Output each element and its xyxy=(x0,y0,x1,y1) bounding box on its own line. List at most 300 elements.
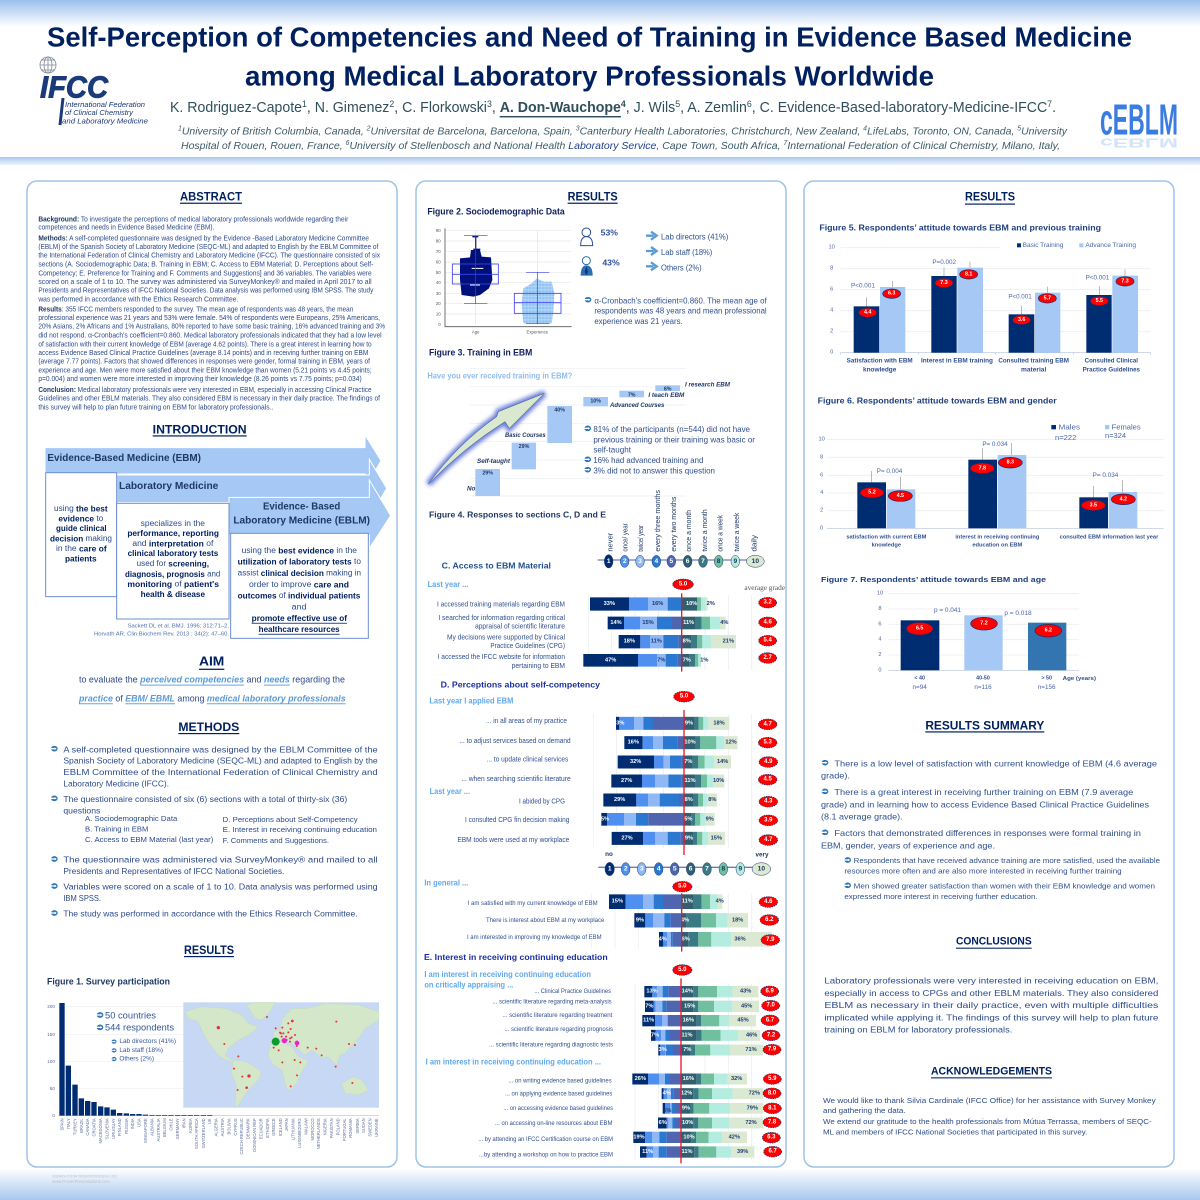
row: on-line resources xyxy=(495,1117,781,1128)
bar chart: gender: 8 xyxy=(820,454,823,460)
frequency scale 1-10: 9 xyxy=(733,558,737,565)
bar chart: participation by country: CHILE xyxy=(168,1118,173,1131)
panel: abstract: Presidents and Representatives of IFCC National Societies. Data analysis was performed using IBM SPSS. The study xyxy=(38,287,374,295)
frequency scale labels xyxy=(605,490,758,552)
row: training materials: I accessed training materials regarding EBM xyxy=(437,599,565,608)
bar chart: participation by country: FINLAND xyxy=(117,1118,122,1136)
reference badge 5.0 xyxy=(673,579,693,590)
bar chart: previous training: P<0.001 xyxy=(851,282,875,289)
conclusions text: especially in access to CPGs and other EBLM materials. They also considered xyxy=(824,988,1159,998)
row: clinical practice guidelines: My decisions were supported by Clinical xyxy=(447,632,565,641)
bar chart: participation by country: CANADA xyxy=(85,1118,90,1136)
box: EBM definition: decision making xyxy=(50,534,112,543)
authors: , xyxy=(492,100,500,116)
bar chart: gender: interest in receiving continuing xyxy=(955,534,1039,540)
poster credit: www.PosterPresentations.com xyxy=(52,1179,110,1184)
logo: IFCC: and Laboratory Medicine xyxy=(62,118,148,126)
bar chart: participation by country: 150 xyxy=(47,1032,55,1037)
bar chart: previous training: P=0.002 xyxy=(932,259,956,266)
conclusions text: training on EBLM for laboratory professionals. xyxy=(824,1025,1012,1035)
panel: right column xyxy=(804,181,1174,1167)
reference line at 5.0 xyxy=(680,893,684,952)
figure 2 title: Figure 2. Sociodemographic Data xyxy=(427,207,565,217)
panel: abstract: Competency; E. Preference for Training and F. Comments and Suggestions] and 36 variables. The variables were xyxy=(38,269,372,277)
methods: IBM SPSS. xyxy=(63,893,101,903)
reference badge 5.0 xyxy=(674,691,694,702)
aim xyxy=(78,655,346,703)
callout: countries and respondents: Lab directors (41%) xyxy=(119,1038,176,1045)
training bullet list xyxy=(584,424,755,475)
bar chart: age: 40-50 xyxy=(976,676,990,682)
frequency scale labels: twice a month xyxy=(700,509,709,552)
row: writing guidelines: 16% xyxy=(683,1076,694,1082)
row: on-line resources: ... on accessing on-line resources about EBM xyxy=(495,1120,612,1127)
frequency scale labels: daily xyxy=(749,535,758,552)
row: certification course: 19% xyxy=(633,1134,645,1140)
box plot: age and experience: 0 xyxy=(438,322,441,327)
bar chart: participation by country: SLOVENIA xyxy=(104,1118,109,1139)
panel: abstract: professional experience was 21 years and 53% were female. 54% of respondents were Europeans, 25% Americans, xyxy=(38,314,380,322)
bar chart: age: n=94 xyxy=(913,684,927,691)
arrow: evidence-based medicine xyxy=(45,435,381,488)
row: abided by CPG xyxy=(519,796,778,807)
authors: 4 xyxy=(621,99,626,109)
bar chart: previous training: Consulted Clinical xyxy=(1085,359,1138,365)
results heading and figures 2-3 xyxy=(427,190,767,496)
bar chart: gender: 6 xyxy=(820,472,823,478)
row: clinical practice guidelines: 13% xyxy=(646,989,658,995)
bar chart: participation by country: SWEDEN xyxy=(367,1118,372,1137)
methods: METHODS xyxy=(178,720,239,734)
figure 4 title: Figure 4. Responses to sections C, D and E xyxy=(429,509,606,519)
box plot: age and experience: 60 xyxy=(436,259,441,264)
summary bullet list: (8.1 average grade). xyxy=(821,812,903,822)
row: writing guidelines: 26% xyxy=(635,1076,646,1082)
bar chart: age: p = 0.041 xyxy=(934,607,961,614)
bar chart: previous training: 10 xyxy=(829,245,835,251)
results: figure 1: RESULTS xyxy=(184,943,234,957)
affiliations: 2 xyxy=(366,125,371,132)
row: writing guidelines xyxy=(508,1074,781,1084)
waterfall chart: training in EBM: 10% xyxy=(590,399,601,405)
row: abided by CPG: 4.3 xyxy=(764,799,773,805)
row: workshop: 39% xyxy=(737,1149,748,1155)
row: applying guidelines xyxy=(505,1088,781,1099)
box plot: age and experience: Experience xyxy=(527,329,549,334)
bar chart: age: 10 xyxy=(877,591,883,597)
frequency scale labels: every three months xyxy=(653,490,662,552)
box: EBM definition xyxy=(46,473,117,597)
row: meta-analysis: 7% xyxy=(645,1003,653,1009)
row: diagnostic tests xyxy=(489,1041,781,1055)
bar chart: gender: 4 xyxy=(820,490,823,496)
waterfall chart: training in EBM: 29% xyxy=(519,444,530,450)
row: clinical practice guidelines: 43% xyxy=(740,989,751,995)
row: prognosis: 46% xyxy=(746,1032,757,1038)
box: laboratory medicine definition: health & disease xyxy=(141,590,206,599)
methods: E. Interest in receiving continuing education xyxy=(223,825,377,834)
row: clinical practice guidelines: Practice Guidelines (CPG) xyxy=(490,641,565,650)
aim: practice of EBM/ EBML among medical laboratory professionals xyxy=(78,693,346,703)
row: adjust services xyxy=(459,736,777,748)
page background: top gradient band xyxy=(0,0,1200,27)
box: EBM definition: guide clinical xyxy=(56,524,107,533)
row: meta-analysis: ... scientific literature regarding meta-analysis xyxy=(492,998,612,1005)
bar chart: gender: knowledge xyxy=(872,542,901,548)
waterfall chart: training in EBM xyxy=(467,368,731,496)
row: EBM tools xyxy=(457,835,778,845)
acknowledgements text: We extend our gratitude to the health professionals from Mútua Terrassa, members of SEQC- xyxy=(823,1117,1152,1126)
row: update clinical services: 4.9 xyxy=(764,759,773,765)
panel: abstract: (EBLM) of the Spanish Society of Laboratory Medicine (SEQC-ML) and adapted to English by the EBLM Committee of xyxy=(38,243,378,251)
bar chart: participation by country: AUSTRIA xyxy=(220,1118,225,1136)
bar chart: participation by country: BOLIVIA xyxy=(226,1118,231,1135)
row: treatment: ... scientific literature regarding treatment xyxy=(502,1012,613,1019)
row: adjust services: 12% xyxy=(725,740,737,746)
authors: 6 xyxy=(747,99,752,109)
row: accessing guidelines xyxy=(503,1103,781,1114)
row: all areas xyxy=(486,716,777,730)
row: applying guidelines: ... on applying evidence based guidelines xyxy=(505,1090,612,1097)
affiliations: Laboratory Service, Cape Town, South Africa, xyxy=(568,140,781,152)
authors: , C. Evidence-Based-laboratory-Medicine-IFCC xyxy=(752,100,1047,116)
bar chart: gender: 4.2 xyxy=(1120,496,1127,502)
row: workshop: 11% xyxy=(642,1149,653,1155)
row: certification course: 6.3 xyxy=(767,1135,776,1141)
bar chart: participation by country: GREECE xyxy=(271,1118,276,1136)
row: IFCC website: 47% xyxy=(605,657,616,663)
panel: abstract: this survey will help to plan future training on EBM for laboratory professionals.. xyxy=(38,403,273,411)
row: IFCC website: 7% xyxy=(657,657,665,663)
authors: . xyxy=(1052,100,1056,116)
bar chart: participation by country: GERMANY xyxy=(175,1118,180,1139)
training bullet list: 3% did not to answer this question xyxy=(593,465,715,475)
row: clinical practice guidelines: 8% xyxy=(683,639,691,645)
row: meta-analysis: 7.0 xyxy=(766,1003,775,1009)
row: abided by CPG: 8% xyxy=(708,797,716,803)
panel: abstract: the International Federation of Clinical Chemistry and Laboratory Medicine (IFCC). The questionnaire consisted of six xyxy=(38,252,380,260)
bar chart: participation by country: ICELAND xyxy=(278,1118,283,1136)
frequency scale 1-10: 4 xyxy=(654,558,658,565)
bar chart: gender: 7.8 xyxy=(979,465,986,471)
row: critical appraisal: 14% xyxy=(610,620,622,626)
bar chart: gender: 3.5 xyxy=(1090,502,1097,508)
row: all areas: 3% xyxy=(616,720,624,726)
methods: The questionnaire was administered via SurveyMonkey® and mailed to all xyxy=(63,855,378,865)
row: treatment: 16% xyxy=(683,1018,694,1024)
bar chart: participation by country: URUGUAY xyxy=(111,1118,116,1139)
agreement scale 1-10: 1 xyxy=(608,865,612,872)
methods: The questionnaire consisted of six (6) sections with a total of thirty-six (36) xyxy=(63,794,348,804)
row: adjust services: 16% xyxy=(628,740,639,746)
methods: questions xyxy=(63,805,100,815)
row: adjust services: 5.3 xyxy=(763,740,772,746)
box: laboratory medicine definition: diagnosis, prognosis and xyxy=(125,569,220,578)
waterfall chart: training in EBM: 6% xyxy=(664,386,672,392)
bar chart: previous training: 3.6 xyxy=(1018,317,1025,323)
row: satisfied with knowledge: 15% xyxy=(612,899,623,905)
authors: 3 xyxy=(487,99,492,109)
panel: middle column xyxy=(416,181,786,1167)
reference line at 5.0 xyxy=(679,978,683,1163)
arrow titles: Evidence- Based xyxy=(263,501,340,512)
row: certification course: ... by attending an IFCC Certification course on EBM xyxy=(478,1136,613,1143)
row: training materials: 33% xyxy=(604,601,615,607)
figure 4: section C xyxy=(428,490,785,689)
methods: Variables were scored on a scale of 1 to 10. Data analysis was performed using xyxy=(63,882,378,892)
bar chart: gender: 10 xyxy=(819,437,825,443)
bar chart: age: n=116 xyxy=(974,684,992,691)
frequency scale labels: once a week xyxy=(715,515,724,552)
row: diagnostic tests: 7% xyxy=(683,1047,691,1053)
box plot: age and experience: 30 xyxy=(436,291,441,296)
bar chart: gender: 8.3 xyxy=(1007,460,1014,466)
map: respondents by country xyxy=(183,1002,379,1108)
training bullet list: 81% of the participants (n=544) did not have xyxy=(593,424,750,434)
methods xyxy=(51,720,378,919)
authors: 1 xyxy=(302,99,307,109)
bar chart: previous training: knowledge xyxy=(863,367,897,373)
row: interest at workplace xyxy=(486,915,779,925)
bar chart: participation by country: 100 xyxy=(47,1059,55,1064)
conclusions text: Laboratory professionals were very interested in receiving education on EBM, xyxy=(824,976,1158,986)
frequency scale labels: twice/ year xyxy=(636,525,645,552)
methods: EBLM Committee of the International Federation of Clinical Chemistry and xyxy=(63,767,378,777)
panel: abstract: of satisfaction with their current knowledge of EBM (average 4.62 points). There is a great interest in learning how to xyxy=(38,341,372,349)
title: among Medical Laboratory Professionals Worldwide xyxy=(245,60,934,92)
panel: abstract: ABSTRACT xyxy=(180,190,243,204)
bar chart: participation by country: CZECH REPUBLIC xyxy=(239,1118,244,1155)
cronbach note: respondents was 48 years and mean professional xyxy=(594,306,767,316)
row: consulted CPG: 3.9 xyxy=(764,817,773,823)
box: laboratory medicine definition: and interpretation of xyxy=(132,539,214,548)
summary bullet list: grade). xyxy=(821,771,850,781)
authors: , N. Gimenez xyxy=(307,100,389,116)
methods: The study was performed in accordance with the Ethics Research Committee. xyxy=(63,909,358,919)
job role list xyxy=(646,232,729,272)
box: laboratory medicine definition xyxy=(117,503,229,619)
row: adjust services: ... to adjust services based on demand xyxy=(459,736,571,745)
agreement scale 1-10: very xyxy=(755,851,769,858)
row: certification course xyxy=(478,1132,780,1143)
row: certification course: 10% xyxy=(683,1134,695,1140)
affiliations: Hospital of Rouen, Rouen, France, xyxy=(181,140,343,152)
row: diagnostic tests: 7.9 xyxy=(768,1047,777,1053)
subheading: continuing education: I am interest in receiving continuing education ... xyxy=(426,1057,601,1066)
bar chart: age: > 50 xyxy=(1041,676,1052,682)
box: EBM definition: in the care of xyxy=(56,544,107,553)
box: EBLM definition: using the best evidence in the xyxy=(242,546,358,555)
box: EBLM definition: promote effective use of xyxy=(252,614,347,623)
subheading: in general: In general ... xyxy=(424,878,468,887)
row: prognosis xyxy=(504,1026,780,1041)
arrow: EBLM xyxy=(229,480,391,548)
authors: , A. Zemlin xyxy=(680,100,747,116)
bar chart: participation by country: DOMINICAN REP xyxy=(252,1118,257,1152)
row: training materials: 16% xyxy=(652,601,663,607)
affiliations: International Federation of Clinical Chemistry, Milano, Italy, xyxy=(787,140,1060,152)
icon: male xyxy=(581,257,593,276)
conclusions text: EBLM as necessary in their daily practice, even with multiple difficulties xyxy=(824,1000,1159,1010)
title: Self-Perception of Competencies and Need of Training in Evidence Based Medicine xyxy=(47,22,1132,52)
summary bullet list: expressed more interest in receiving further education. xyxy=(844,892,1038,901)
bar chart: gender: satisfaction with current EBM xyxy=(846,534,927,540)
row: improving knowledge: 4% xyxy=(659,936,667,942)
summary bullet list: EBM, gender, years of experience and age. xyxy=(821,840,995,850)
box: EBM definition: patients xyxy=(65,554,97,563)
row: improving knowledge: 36% xyxy=(734,936,746,942)
job role list: Others (2%) xyxy=(661,263,702,272)
row: update clinical services: 7% xyxy=(684,759,692,765)
row: all areas: 18% xyxy=(713,720,725,726)
affiliations: University of Stellenbosch and National Health xyxy=(349,140,568,152)
row: EBM tools: EBM tools were used at my workplace xyxy=(457,835,569,844)
bar chart: gender xyxy=(819,422,1164,548)
acknowledgements text: We would like to thank Silvia Cardinale (IFCC Office) for her assistance with Survey Monkey xyxy=(823,1096,1156,1105)
row: satisfied with knowledge: 4% xyxy=(716,899,724,905)
box plot: age and experience: 80 xyxy=(436,238,441,243)
results: figure 1 xyxy=(47,943,379,1155)
affiliations: LifeLabs, Toronto, ON, Canada, xyxy=(867,126,1017,138)
logo: IFCC xyxy=(40,57,148,126)
bar chart: age: 7.2 xyxy=(980,621,988,627)
bar chart: participation by country: UKRAINE xyxy=(374,1118,379,1137)
callout: countries and respondents: Others (2%) xyxy=(119,1055,154,1062)
row: adjust services: 10% xyxy=(684,740,696,746)
waterfall chart: training in EBM: I research EBM xyxy=(685,381,731,388)
row: applying guidelines: 12% xyxy=(681,1091,692,1097)
box: laboratory medicine definition: specializes in the xyxy=(141,519,206,528)
summary bullet list xyxy=(821,758,1160,901)
references xyxy=(94,623,229,637)
row: critical appraisal: I searched for information regarding critical xyxy=(438,613,565,622)
authors: 5 xyxy=(675,99,680,109)
bar chart: participation by country: PAKISTAN xyxy=(329,1118,334,1138)
training bullet list: self-taught xyxy=(593,445,632,455)
row: interest at workplace: There is interest about EBM at my workplace xyxy=(486,917,605,924)
summary bullet list: grade) and in learning how to access Evidence Based Clinical Practice Guidelines xyxy=(821,799,1150,809)
bar chart: participation by country: CROATIA xyxy=(91,1118,96,1137)
bar chart: previous training xyxy=(829,242,1151,373)
affiliations: 3 xyxy=(576,125,580,132)
methods: F. Comments and Suggestions. xyxy=(223,836,329,845)
bar chart: gender: P= 0.034 xyxy=(982,441,1008,448)
row: critical appraisal: 15% xyxy=(642,620,654,626)
acknowledgements text xyxy=(823,1096,1156,1136)
reference line at 5.0 xyxy=(680,593,684,672)
figure 1 title: Figure 1. Survey participation xyxy=(47,976,170,986)
summary bullet list: Men showed greater satisfaction than women with their EBM knowledge and women xyxy=(854,881,1155,890)
row: workshop: 11% xyxy=(681,1149,693,1155)
agreement scale 1-10 xyxy=(598,851,771,876)
box: EBLM definition: utilization of laboratory tests to xyxy=(238,557,362,566)
row: workshop xyxy=(479,1146,782,1158)
row: update clinical services: ... to update clinical services xyxy=(487,754,569,763)
row: satisfied with knowledge: 4.6 xyxy=(764,899,773,905)
row: clinical practice guidelines xyxy=(447,632,777,650)
bar chart: participation by country: 200 xyxy=(47,1004,55,1009)
bar chart: previous training: Advance Training xyxy=(1085,242,1136,249)
row: training materials: 3.2 xyxy=(763,600,772,606)
row: accessing guidelines: 5% xyxy=(663,1108,671,1114)
bar chart: participation by country: MOROCCO xyxy=(310,1118,315,1141)
bar chart: previous training: 5.7 xyxy=(1044,295,1051,301)
row: IFCC website: 7% xyxy=(683,657,691,663)
row: improving knowledge: 6% xyxy=(682,936,690,942)
row: diagnostic tests: 71% xyxy=(745,1047,757,1053)
methods: A self-completed questionnaire was designed by the EBLM Committee of the xyxy=(63,744,378,754)
reference badge 5.0: 5.0 xyxy=(680,694,689,700)
panel: abstract: Methods: A self-completed questionnaire was designed by the Evidence -Based Laboratory Medicine Committee xyxy=(38,235,369,243)
row: prognosis: 7.2 xyxy=(767,1032,776,1038)
waterfall chart: training in EBM: 29% xyxy=(482,471,493,477)
bar chart: participation by country: JAPAN xyxy=(284,1118,289,1131)
title xyxy=(47,22,1132,92)
section D heading: D. Perceptions about self-competency xyxy=(441,679,600,689)
row: clinical practice guidelines: 6.9 xyxy=(765,988,774,994)
aim: to evaluate the perceived competencies and needs regarding the xyxy=(79,675,345,685)
row: EBM tools: 15% xyxy=(711,835,722,841)
row: interest at workplace: 9% xyxy=(636,917,644,923)
box: laboratory medicine definition: performance, reporting xyxy=(127,529,219,538)
frequency scale 1-10 xyxy=(598,555,764,568)
page background: bottom gradient band xyxy=(0,1168,1200,1200)
bar chart: participation by country: POLAND xyxy=(335,1118,340,1135)
bar chart: gender: 2 xyxy=(820,508,823,514)
agreement scale 1-10: 2 xyxy=(624,865,628,872)
bar chart: previous training: material xyxy=(1021,367,1047,373)
subheading: last year: Last year ... xyxy=(428,580,468,589)
row: accessing guidelines: 9% xyxy=(682,1105,690,1111)
references: Horvath AR. Clin Biochem Rev. 2013 ; 34(2): 47–60. xyxy=(94,631,229,637)
box plot: age and experience: 20 xyxy=(436,301,441,306)
arrow titles: Laboratory Medicine (EBLM) xyxy=(233,515,370,526)
row: applying guidelines: 8.0 xyxy=(768,1090,777,1096)
methods: Spanish Society of Laboratory Medicine (SEQC-ML) and adapted to English by the xyxy=(63,756,378,766)
row: prognosis: ... scientific literature regarding prognosis xyxy=(504,1026,613,1033)
aim: AIM xyxy=(199,655,224,669)
row: treatment: 6.7 xyxy=(766,1017,775,1023)
waterfall chart: training in EBM: Advanced Courses xyxy=(609,402,665,409)
agreement scale 1-10: 5 xyxy=(673,865,677,872)
bar chart: gender: 4.5 xyxy=(897,493,904,499)
figure 4: section E xyxy=(424,952,782,1163)
row: certification course: 42% xyxy=(729,1134,740,1140)
bar chart: age: 2 xyxy=(878,652,882,658)
row: abided by CPG: 29% xyxy=(614,797,625,803)
callout: countries and respondents xyxy=(96,1010,176,1062)
row: critical appraisal: 4.6 xyxy=(763,619,772,625)
bar chart: previous training: Satisfaction with EBM xyxy=(847,359,913,365)
row: treatment xyxy=(502,1012,779,1026)
row: IFCC website: 2.7 xyxy=(763,655,772,661)
row: EBM tools: 9% xyxy=(685,835,693,841)
figure 4: section D and general xyxy=(424,691,780,952)
bar chart: participation by country: LUXEMBOURG xyxy=(297,1118,302,1148)
row: prognosis: 11% xyxy=(681,1032,693,1038)
panel: abstract xyxy=(37,190,386,411)
cronbach note: experience was 21 years. xyxy=(594,316,683,326)
box: EBLM definition xyxy=(231,533,368,638)
row: accessing guidelines: ... on accessing evidence based guidelines xyxy=(503,1105,613,1112)
row: interest at workplace: 18% xyxy=(732,917,743,923)
row: searching literature xyxy=(461,774,777,785)
poster credit: RESEARCH POSTER PRESENTATION DESIGN © 2015 xyxy=(52,1174,117,1178)
box plot: age and experience: 50 xyxy=(436,270,441,275)
heading: conclusions: CONCLUSIONS xyxy=(956,936,1032,948)
box: EBM definition: evidence to xyxy=(58,514,104,523)
bar chart: age: 0 xyxy=(878,667,882,673)
